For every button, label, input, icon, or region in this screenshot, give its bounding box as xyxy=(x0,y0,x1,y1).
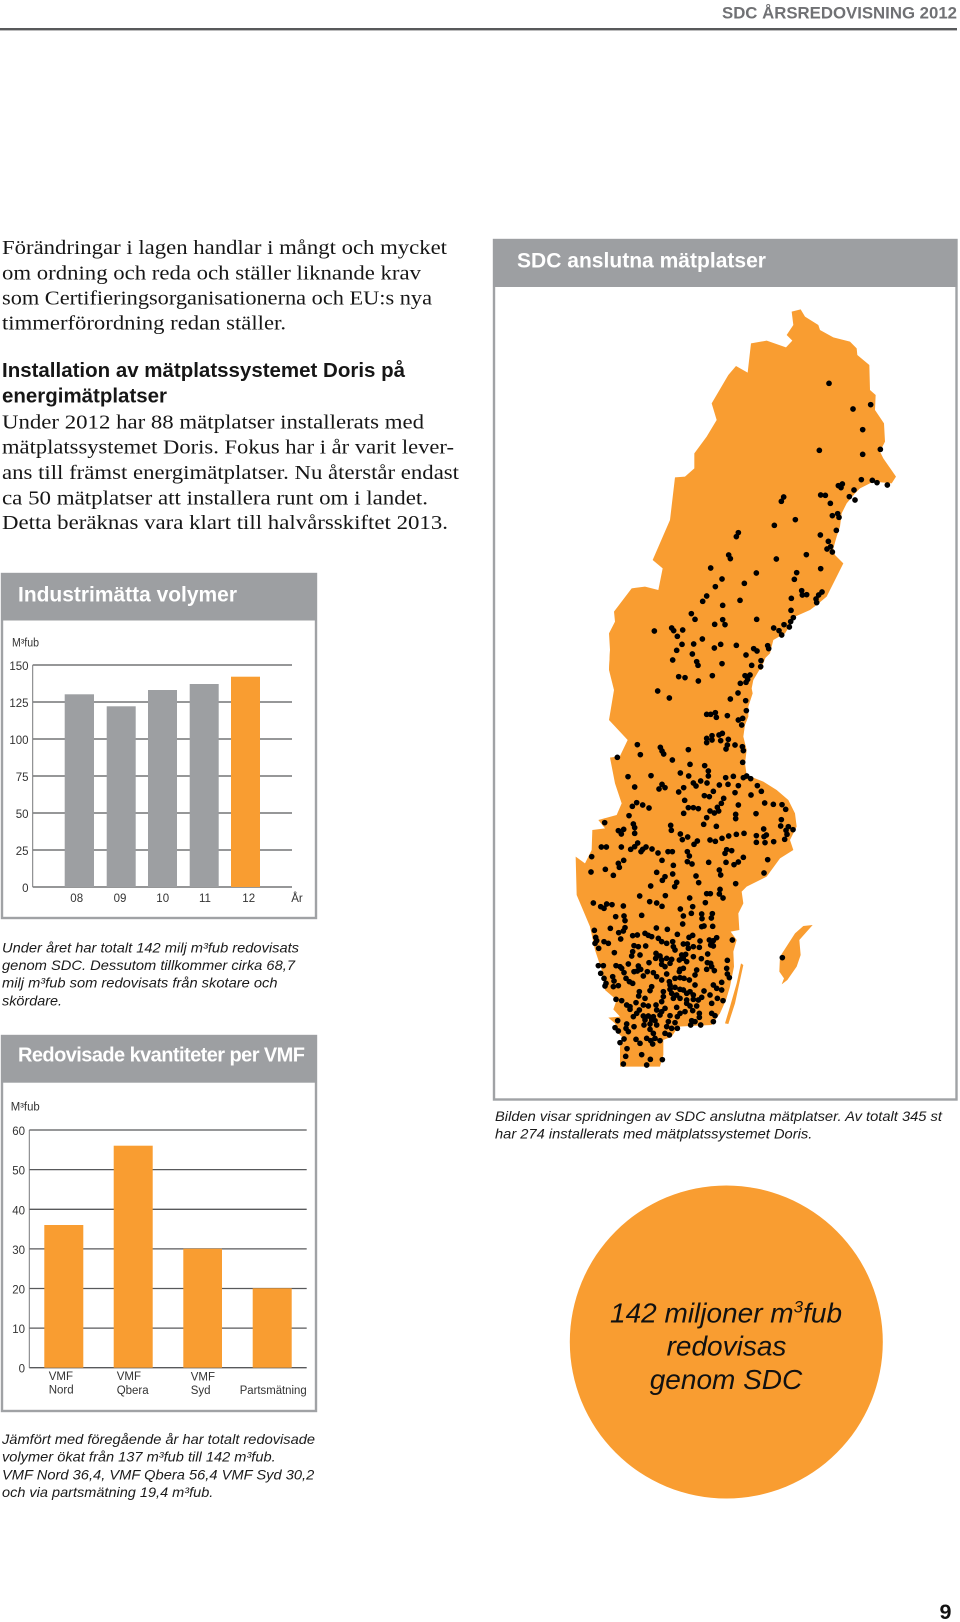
panel header: SDC anslutna mätplatser xyxy=(493,239,957,287)
bar chart: quantities per VMF: Syd xyxy=(191,1385,211,1397)
caption: map xyxy=(495,1108,943,1142)
map: southern Sweden xyxy=(576,650,813,1067)
intro text block: om ordning och reda och ställer liknande krav xyxy=(2,262,422,284)
bar chart: quantities per VMF: VMF xyxy=(117,1371,141,1383)
caption: Industrimätta volymer: genom SDC. Dessutom tillkommer cirka 68,7 xyxy=(2,957,296,973)
bar chart: yearly volumes: 100 xyxy=(9,735,28,747)
caption: Industrimätta volymer xyxy=(2,939,299,1008)
bar chart: yearly volumes: M³fub xyxy=(12,638,39,650)
intro text block: timmerförordning redan ställer. xyxy=(2,313,286,335)
map dots: southern sites xyxy=(591,675,793,1065)
body text: Doris installation: ans till främst energimätplatser. Nu återstår endast xyxy=(2,462,459,484)
callout circle: 142 miljoner: fub xyxy=(803,1297,842,1328)
body text: Doris installation: ca 50 mätplatser att installera runt om i landet. xyxy=(2,487,428,509)
caption: Industrimätta volymer: Under året har totalt 142 milj m³fub redovisats xyxy=(2,939,299,955)
panel: Industrimätta volymer xyxy=(1,573,317,918)
panel: SDC anslutna mätplatser xyxy=(493,239,957,1100)
caption: Redovisade kvantiteter: VMF Nord 36,4, VMF Qbera 56,4 VMF Syd 30,2 xyxy=(2,1466,315,1482)
bar chart: yearly volumes: 11 xyxy=(199,893,211,905)
caption: Industrimätta volymer: skördare. xyxy=(2,992,62,1008)
heading: Doris installation: Installation av mätplatssystemet Doris på xyxy=(2,359,406,382)
panel header: Redovisade kvantiteter per VMF: Redovisade kvantiteter per VMF xyxy=(18,1044,305,1066)
bar chart: yearly volumes: 08 xyxy=(70,893,83,905)
callout circle: 142 miljoner: 3 xyxy=(794,1297,804,1316)
bar chart: quantities per VMF: VMF xyxy=(49,1371,73,1383)
intro text block: Förändringar i lagen handlar i mångt och mycket xyxy=(2,237,447,259)
bar chart: quantities per VMF: 50 xyxy=(12,1166,25,1178)
bar chart: quantities per VMF: Qbera xyxy=(117,1385,149,1397)
map: northern Sweden xyxy=(609,309,896,670)
caption: map: Bilden visar spridningen av SDC anslutna mätplatser. Av totalt 345 st xyxy=(495,1108,943,1124)
caption: map: har 274 installerats med mätplatssystemet Doris. xyxy=(495,1126,812,1142)
caption: Redovisade kvantiteter: Jämfört med föregående år har totalt redovisade xyxy=(1,1431,315,1447)
map of Sweden with measuring sites xyxy=(576,309,896,1067)
panel header: Industrimätta volymer: Industrimätta volymer xyxy=(18,584,237,607)
intro text block: som Certifieringsorganisationerna och EU:s nya xyxy=(2,288,432,310)
bar chart: yearly volumes: 25 xyxy=(16,846,28,858)
bar chart: yearly volumes: 10 xyxy=(156,893,169,905)
caption: Redovisade kvantiteter: och via partsmätning 19,4 m³fub. xyxy=(2,1484,213,1500)
caption: Redovisade kvantiteter xyxy=(1,1431,315,1500)
bar chart: quantities per VMF: 0 xyxy=(19,1364,25,1376)
bar chart: yearly volumes: 09 xyxy=(114,893,126,905)
panel header: Industrimätta volymer xyxy=(1,573,317,620)
bar chart: yearly volumes: 150 xyxy=(9,661,28,673)
callout circle: 142 miljoner: redovisas xyxy=(667,1331,786,1362)
bar chart: yearly volumes: 50 xyxy=(16,809,28,821)
bar chart: yearly volumes: 75 xyxy=(16,772,28,784)
bar chart: quantities per VMF: Partsmätning xyxy=(240,1385,307,1397)
bar chart: quantities per VMF: Nord xyxy=(49,1384,74,1396)
bar chart: yearly volumes: 125 xyxy=(9,698,28,710)
callout circle: 142 miljoner xyxy=(570,1186,883,1498)
bar chart: quantities per VMF: 10 xyxy=(12,1324,25,1336)
heading: Doris installation xyxy=(2,359,406,408)
bar chart: yearly volumes xyxy=(9,638,303,905)
callout circle: 142 miljoner: genom SDC xyxy=(650,1364,803,1395)
bar chart: quantities per VMF: VMF xyxy=(191,1372,215,1384)
bar chart: yearly volumes: 0 xyxy=(22,883,28,895)
caption: Redovisade kvantiteter: volymer ökat från 137 m³fub till 142 m³fub. xyxy=(2,1449,276,1465)
caption: Industrimätta volymer: milj m³fub som redovisats från skotare och xyxy=(2,975,278,991)
bar chart: yearly volumes: År xyxy=(291,892,303,905)
heading: Doris installation: energimätplatser xyxy=(2,386,167,408)
callout circle: 142 miljoner: 142 miljoner m xyxy=(610,1297,794,1328)
body text: Doris installation xyxy=(2,411,459,534)
map dots: northern sites xyxy=(654,383,887,667)
bar chart: quantities per VMF: 20 xyxy=(12,1284,25,1296)
bar chart: yearly volumes: 12 xyxy=(242,893,255,905)
panel: Redovisade kvantiteter per VMF xyxy=(1,1035,317,1411)
bar chart: quantities per VMF: M³fub xyxy=(11,1101,40,1113)
body text: Doris installation: Under 2012 har 88 mätplatser installerats med xyxy=(2,411,424,433)
bar chart: quantities per VMF xyxy=(11,1101,307,1397)
panel header: SDC anslutna mätplatser: SDC anslutna mätplatser xyxy=(517,250,766,272)
page header: SDC ÅRSREDOVISNING 2012 xyxy=(722,4,957,22)
bar chart: quantities per VMF: 60 xyxy=(12,1126,25,1138)
panel header: Redovisade kvantiteter per VMF xyxy=(1,1035,317,1083)
body text: Doris installation: Detta beräknas vara klart till halvårsskiftet 2013. xyxy=(2,512,448,534)
intro text block xyxy=(2,237,447,335)
bar chart: quantities per VMF: 30 xyxy=(12,1245,25,1257)
body text: Doris installation: mätplatssystemet Doris. Fokus har i år varit lever- xyxy=(2,437,454,459)
bar chart: quantities per VMF: 40 xyxy=(12,1205,25,1217)
